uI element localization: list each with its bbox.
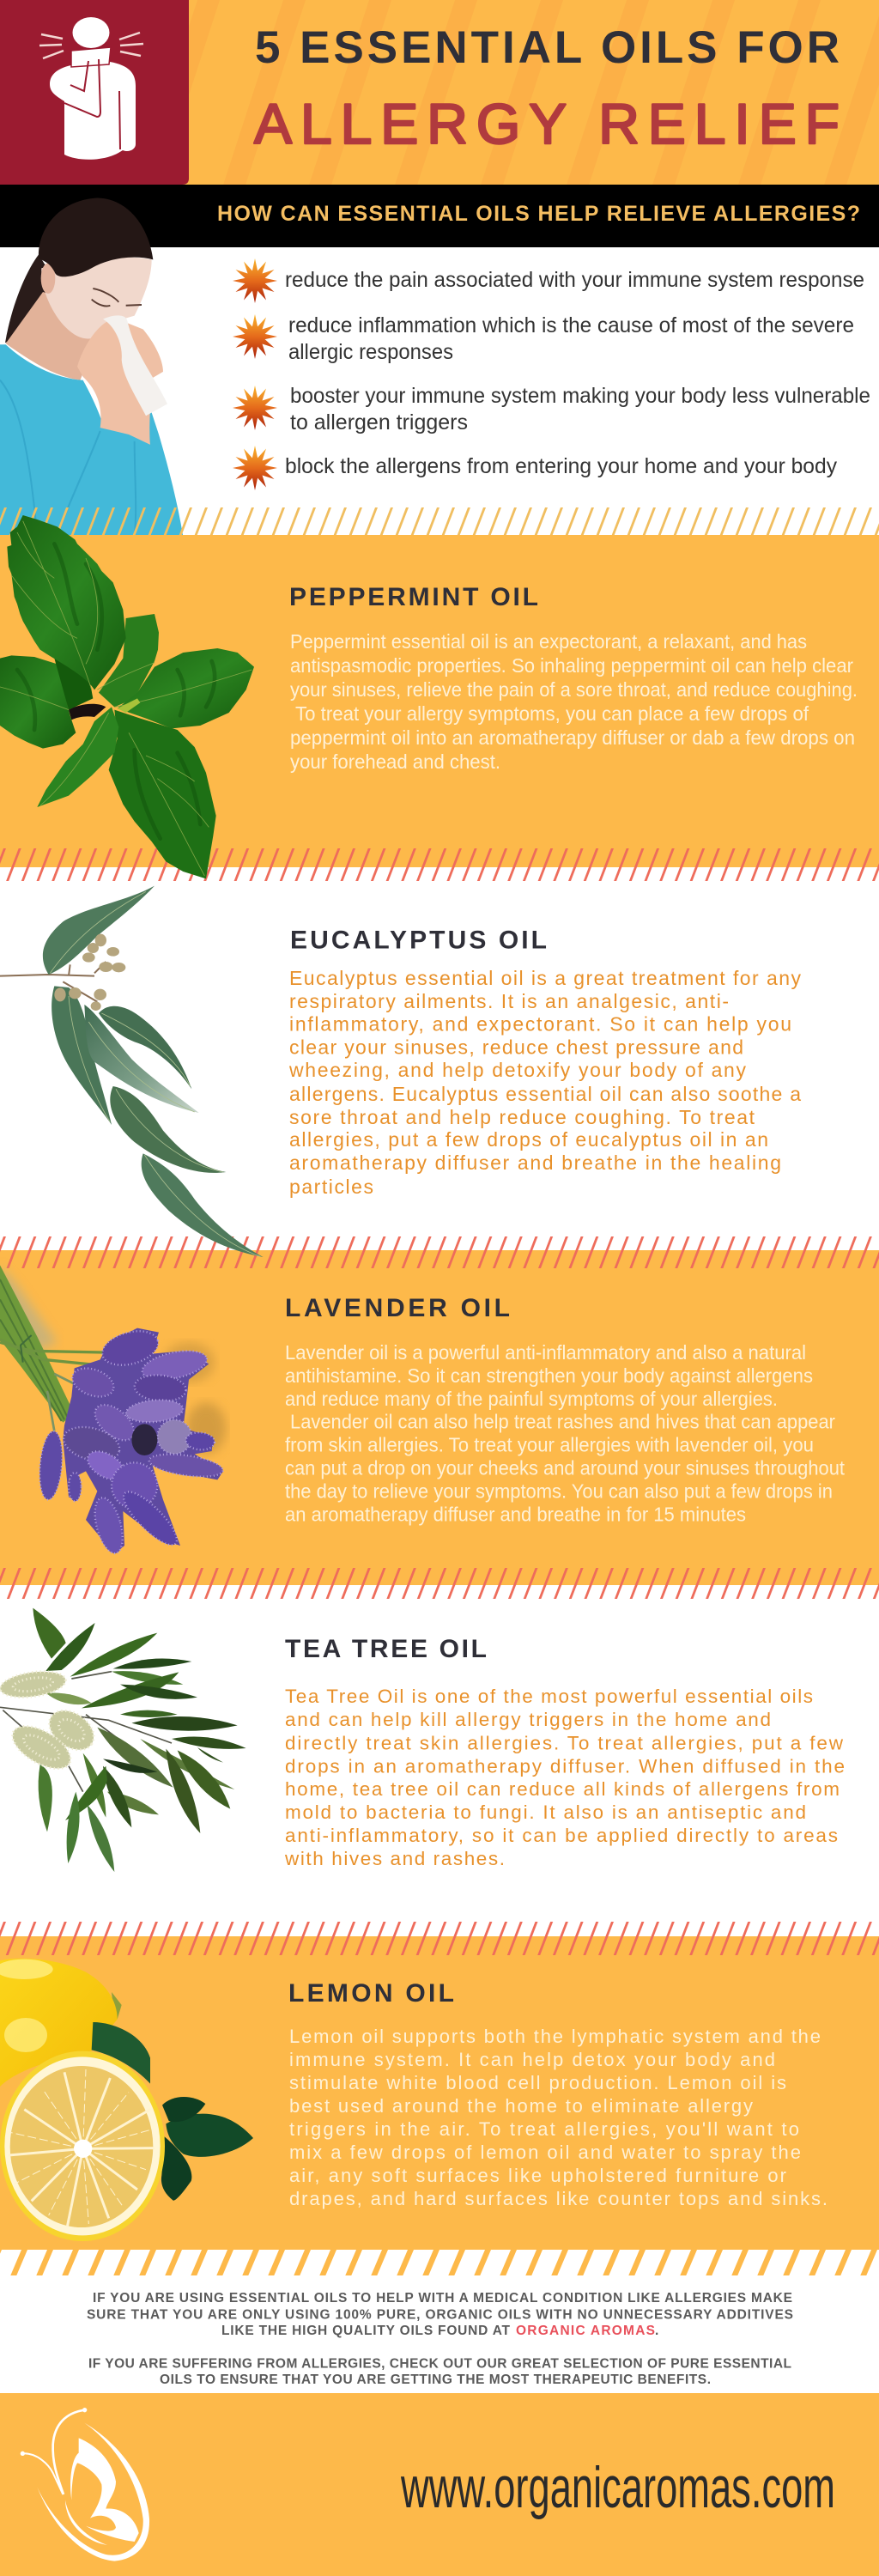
body text: your forehead and chest. [290, 750, 500, 773]
black subheading band [0, 185, 879, 247]
body text: immune system. It can help detox your body and [289, 2049, 775, 2070]
body text [288, 967, 802, 1198]
closing note: OILS TO ENSURE THAT YOU ARE GETTING THE MOST THERAPEUTIC BENEFITS. [160, 2372, 711, 2387]
bullet 4 [233, 446, 837, 490]
bullet 3 [233, 384, 870, 434]
body text: triggers in the air. To treat allergies, you'll want to [289, 2118, 799, 2140]
closing note: SURE THAT YOU ARE ONLY USING 100% PURE, ORGANIC OILS WITH NO UNNECESSARY ADDITIVES [87, 2308, 793, 2322]
body text: To treat your allergy symptoms, you can place a few drops of [295, 702, 809, 725]
body text: directly treat skin allergies. To treat allergies, put a few [285, 1733, 844, 1753]
closing note: . [655, 2324, 658, 2338]
body text: an aromatherapy diffuser and breathe in for 15 minutes [285, 1504, 746, 1526]
bullet 2: reduce inflammation which is the cause of most of the severe [288, 313, 854, 337]
body text: home, tea tree oil can reduce all kinds of allergens from [285, 1778, 840, 1800]
bullet 1 [233, 258, 864, 303]
body text: antihistamine. So it can strengthen your body against allergens [285, 1364, 813, 1387]
icon panel: sneezing person [0, 0, 189, 185]
subheading: HOW CAN ESSENTIAL OILS HELP RELIEVE ALLERGIES? [217, 202, 860, 226]
title line 1: 5 ESSENTIAL OILS FOR [255, 22, 840, 73]
body text: wheezing, and help detoxify your body of any [288, 1059, 747, 1081]
body text: and can help kill allergy triggers in the home and [285, 1709, 771, 1730]
body text [285, 1341, 846, 1526]
body text: allergens. Eucalyptus essential oil can also soothe a [289, 1083, 801, 1105]
heading: PEPPERMINT OIL [289, 583, 538, 611]
body text: allergies, put a few drops of eucalyptus oil in an [289, 1128, 768, 1151]
body text: stimulate white blood cell production. Lemon oil is [289, 2072, 786, 2093]
body text: antispasmodic properties. So inhaling peppermint oil can help clear [290, 654, 853, 677]
body text: sore throat and help reduce coughing. To treat [289, 1106, 755, 1128]
body text [289, 2026, 827, 2209]
body text: drapes, and hard surfaces like counter tops and sinks. [289, 2188, 827, 2209]
closing note: IF YOU ARE SUFFERING FROM ALLERGIES, CHECK OUT OUR GREAT SELECTION OF PURE ESSENTIAL [88, 2356, 791, 2372]
logo: butterfly [21, 2408, 149, 2561]
closing note: IF YOU ARE USING ESSENTIAL OILS TO HELP WITH A MEDICAL CONDITION LIKE ALLERGIES MAKE [93, 2291, 792, 2306]
illustration: peppermint leaves [0, 515, 254, 878]
body text: with hives and rashes. [284, 1848, 505, 1869]
illustration: tea tree branch [0, 1608, 246, 1872]
body text: can put a drop on your cheeks and around your sinuses throughout [285, 1456, 846, 1479]
bullet list [233, 258, 870, 490]
bullet 1: reduce the pain associated with your immune system response [285, 268, 864, 292]
closing note: ORGANIC AROMAS [516, 2324, 655, 2338]
body text: and reduce many of the painful symptoms of your allergies. [285, 1388, 778, 1410]
heading: EUCALYPTUS OIL [290, 926, 547, 955]
body text: the day to relieve your symptoms. You can also put a few drops in [285, 1480, 833, 1503]
body text: your sinuses, relieve the pain of a sore throat, and reduce coughing. [290, 678, 858, 701]
body text: mix a few drops of lemon oil and water to spray the [289, 2142, 801, 2163]
body text: mold to bacteria to fungi. It also is an antiseptic and [285, 1801, 806, 1823]
panel: lavender oil [0, 1236, 879, 1599]
body text: inflammatory, and expectorant. So it can help you [289, 1013, 791, 1036]
panel: peppermint oil [0, 507, 879, 881]
body text: respiratory ailments. It is an analgesic, anti- [289, 990, 729, 1012]
body text: Peppermint essential oil is an expectorant, a relaxant, and has [290, 630, 807, 653]
body text: from skin allergies. To treat your allergies with lavender oil, you [285, 1434, 814, 1456]
body text: clear your sinuses, reduce chest pressure and [289, 1036, 743, 1058]
bullet 3: booster your immune system making your body less vulnerable [290, 384, 870, 408]
body text: Lavender oil can also help treat rashes and hives that can appear [290, 1410, 835, 1432]
closing note: LIKE THE HIGH QUALITY OILS FOUND AT [221, 2324, 511, 2338]
body text: best used around the home to eliminate allergy [289, 2095, 753, 2117]
illustration: lemons and leaves [0, 1959, 253, 2241]
photo: woman blowing her nose [0, 197, 183, 537]
heading: LEMON OIL [288, 1979, 454, 2008]
closing note [87, 2291, 793, 2387]
body text: Lavender oil is a powerful anti-inflammatory and also a natural [285, 1341, 806, 1364]
body text: drops in an aromatherapy diffuser. When diffused in the [285, 1755, 845, 1777]
body text: anti-inflammatory, so it can be applied directly to areas [285, 1825, 838, 1846]
body text: particles [289, 1176, 373, 1198]
bullet 2: allergic responses [288, 340, 453, 364]
heading: LAVENDER OIL [285, 1294, 510, 1322]
header banner [0, 0, 879, 185]
illustration: lavender bunch [0, 1265, 226, 1556]
panel: lemon oil [0, 1922, 879, 2275]
body text: aromatherapy diffuser and breathe in the healing [289, 1151, 781, 1174]
footer band [0, 2393, 879, 2576]
body text: Eucalyptus essential oil is a great treatment for any [289, 967, 802, 989]
bullet 3: to allergen triggers [290, 410, 468, 434]
bullet 4: block the allergens from entering your home and your body [285, 454, 837, 478]
panel: eucalyptus oil [0, 886, 802, 1257]
illustration: eucalyptus branch [0, 886, 264, 1257]
body text [284, 1686, 845, 1869]
panel: tea tree oil [0, 1608, 845, 1872]
title line 2: ALLERGY RELIEF [254, 92, 840, 155]
heading: TEA TREE OIL [285, 1635, 487, 1663]
body text: peppermint oil into an aromatherapy diffuser or dab a few drops on [290, 726, 855, 749]
body text [290, 630, 858, 773]
bullet 2 [233, 313, 854, 364]
body text: Tea Tree Oil is one of the most powerful essential oils [285, 1686, 813, 1707]
body text: air, any soft surfaces like upholstered furniture or [289, 2165, 786, 2186]
body text: Lemon oil supports both the lymphatic system and the [289, 2026, 821, 2047]
